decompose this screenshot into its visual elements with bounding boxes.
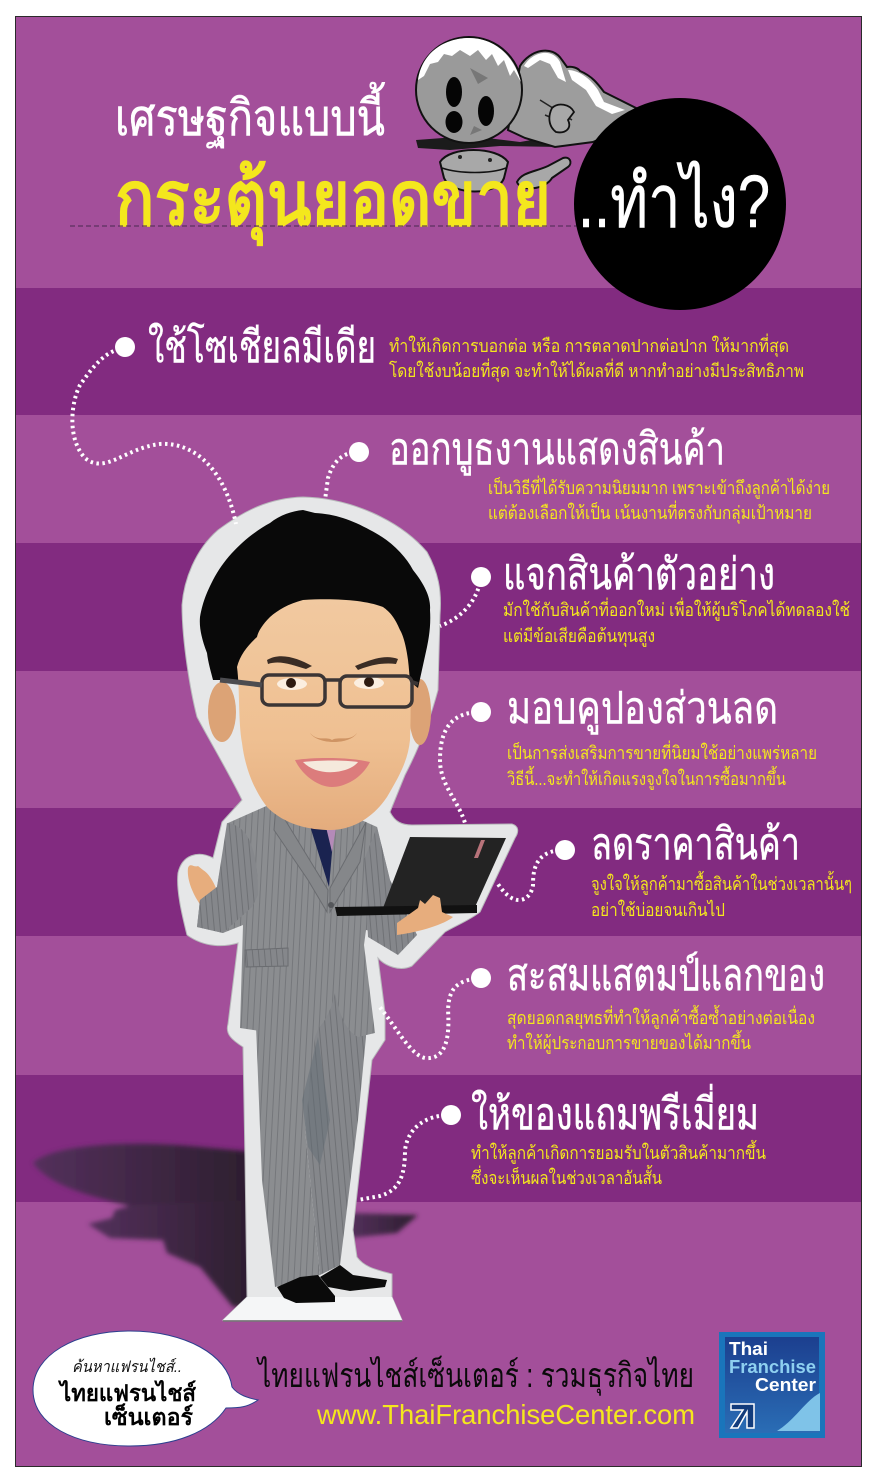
body: [508, 51, 636, 147]
lapels: [274, 805, 328, 912]
right shoe: [320, 1265, 387, 1291]
callout connector: premium: [358, 1115, 451, 1200]
footer tagline: ไทยแฟรนไชส์เซ็นเตอร์ : รวมธุรกิจไทย: [256, 1355, 694, 1396]
item 5: price cut: อย่าใช้บ่อยจนเกินไป: [591, 899, 725, 920]
item 3: free samples: แต่มีข้อเสียคือต้นทุนสูง: [503, 626, 655, 647]
item 4: discount coupons: วิธีนี้...จะทำให้เกิดแรงจูงใจในการซื้อมากขึ้น: [507, 766, 786, 790]
callout connector: social media: [72, 348, 236, 524]
logo: Thai Franchise Center: Thai: [729, 1339, 768, 1359]
item 3: free samples: [471, 550, 850, 647]
item 1: social media: โดยใช้งบน้อยที่สุด จะทำให้ได้ผลที่ดี หากทำอย่างมีประสิทธิภาพ: [389, 358, 804, 382]
rice bowl: [440, 150, 508, 192]
item 5: price cut: [555, 820, 852, 920]
item 7: premium gifts: ให้ของแถมพรีเมี่ยม: [471, 1083, 759, 1139]
jacket pocket: [245, 948, 288, 967]
head: [416, 37, 522, 143]
item 7: premium gifts: ซึ่งจะเห็นผลในช่วงเวลาอันสั้น: [471, 1165, 662, 1188]
item 6: collect stamps: [471, 951, 825, 1054]
logo: Thai Franchise Center: Franchise: [729, 1357, 816, 1377]
trouser folds: [302, 1037, 330, 1165]
dashed underline: [70, 225, 590, 227]
left shoe: [277, 1275, 335, 1303]
item 1: social media: ใช้โซเชียลมีเดีย: [148, 322, 376, 372]
logo: Thai Franchise Center: Center: [755, 1375, 816, 1395]
shirt and tie: [310, 826, 334, 887]
item 2: trade show booth: แต่ต้องเลือกให้เป็น เน้นงานที่ตรงกับกลุ่มเป้าหมาย: [488, 500, 812, 524]
glasses: [220, 675, 418, 707]
left trouser leg: [255, 985, 335, 1287]
speech bubble: เซ็นเตอร์: [104, 1402, 194, 1430]
item 2: trade show booth: ออกบูธงานแสดงสินค้า: [389, 425, 725, 476]
item 1: social media: ทำให้เกิดการบอกต่อ หรือ การตลาดปากต่อปาก ให้มากที่สุด: [389, 333, 789, 357]
standee base: [223, 1297, 402, 1320]
item 4: discount coupons: เป็นการส่งเสริมการขายที่นิยมใช้อย่างแพร่หลาย: [507, 740, 817, 763]
item 6: collect stamps: สุดยอดกลยุทธที่ทำให้ลูกค้าซื้อซ้ำอย่างต่อเนื่อง: [507, 1005, 815, 1029]
item 4: discount coupons: [471, 684, 817, 790]
black circle with question: [574, 98, 786, 310]
right trouser leg: [305, 985, 366, 1275]
heading: line one: เศรษฐกิจแบบนี้: [115, 82, 385, 148]
hair: [200, 510, 430, 688]
right hand: [397, 895, 453, 935]
logo: Thai Franchise Center: [719, 1332, 825, 1438]
spoon: [517, 158, 570, 188]
right sleeve: [364, 827, 417, 955]
callout connector: stamps: [378, 978, 481, 1058]
item 1: social media: [115, 322, 804, 382]
ears: [208, 682, 236, 742]
footer url: www.ThaiFranchiseCenter.com: [316, 1399, 695, 1430]
eyes: [277, 678, 307, 690]
face: [237, 599, 411, 830]
speech bubble: [33, 1331, 258, 1446]
shadow of figure: [33, 1144, 418, 1307]
mouth: [295, 758, 370, 787]
eyebrows: [267, 656, 312, 669]
black circle with question: ..ทำไง?: [578, 160, 770, 243]
item 7: premium gifts: [441, 1083, 766, 1188]
eyes: [446, 77, 462, 107]
callout connector: coupons: [440, 712, 481, 823]
item 2: trade show booth: [349, 425, 830, 524]
item 3: free samples: แจกสินค้าตัวอย่าง: [503, 550, 775, 599]
ground scribble: [416, 130, 600, 150]
heading: line two: กระตุ้นยอดขาย: [115, 157, 551, 247]
laptop: [383, 837, 506, 908]
nose: [310, 733, 357, 742]
jacket: [197, 803, 417, 1037]
cutout silhouette: [178, 497, 518, 1320]
hands: [549, 105, 574, 132]
speech bubble: ไทยแฟรนไชส์: [57, 1379, 197, 1406]
item 5: price cut: ลดราคาสินค้า: [591, 820, 800, 869]
speech bubble: ค้นหาแฟรนไชส์..: [72, 1357, 182, 1376]
item 4: discount coupons: มอบคูปองส่วนลด: [507, 684, 778, 735]
callout connector: trade show: [325, 452, 359, 500]
illustration: exhausted cartoon character: [416, 37, 636, 192]
left hand: [188, 865, 222, 918]
callout connector: discounts: [498, 850, 565, 900]
item 6: collect stamps: ทำให้ผู้ประกอบการขายของได้มากขึ้น: [507, 1030, 751, 1054]
item 7: premium gifts: ทำให้ลูกค้าเกิดการยอมรับในตัวสินค้ามากขึ้น: [471, 1140, 766, 1164]
callout connector: samples: [440, 577, 481, 626]
figure: standee cutout of businessman: [178, 497, 518, 1321]
left sleeve: [197, 823, 258, 933]
